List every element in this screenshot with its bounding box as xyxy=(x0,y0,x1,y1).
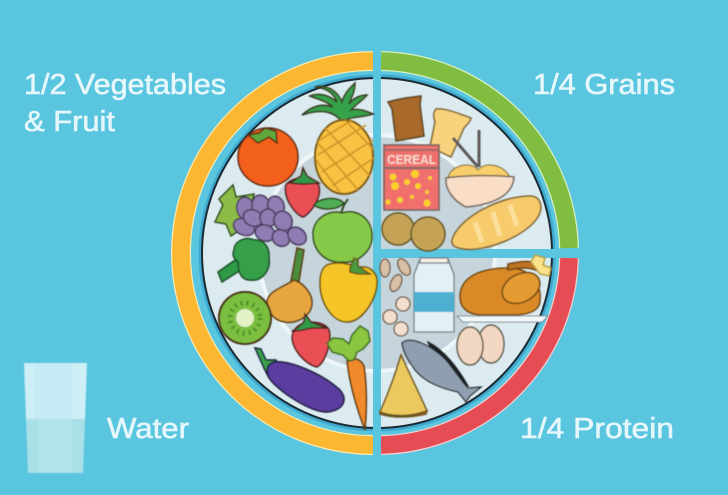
food: fish xyxy=(402,340,481,402)
heading: vegetables and fruit: & Fruit xyxy=(24,106,115,138)
heading: water: Water xyxy=(107,413,189,445)
food: cereal box: CEREAL xyxy=(387,152,436,167)
food: second strawberry xyxy=(292,314,330,367)
food: cereal box xyxy=(384,145,439,210)
food: eggplant xyxy=(255,348,344,412)
food: cookies xyxy=(382,213,445,251)
food: carrot xyxy=(327,326,370,430)
food: serving plate xyxy=(457,316,548,322)
foods xyxy=(215,83,551,430)
heading: protein: 1/4 Protein xyxy=(520,413,674,445)
food: baguette xyxy=(452,196,541,249)
food: broccoli xyxy=(218,239,269,282)
heading: grains: 1/4 Grains xyxy=(533,69,675,101)
ring: protein arc xyxy=(381,258,569,445)
food: cereal bowl with spoons xyxy=(446,130,514,207)
ring: vegetables and fruit arc xyxy=(181,61,373,445)
food: eggs xyxy=(457,325,504,365)
food: beans and nuts xyxy=(380,257,413,336)
infographic xyxy=(23,51,674,474)
food: dark bread xyxy=(388,96,424,141)
food: yellow pepper xyxy=(320,258,377,322)
food: cheese xyxy=(380,355,427,417)
heading: vegetables and fruit xyxy=(24,69,226,138)
food: tomato xyxy=(238,128,298,186)
food: kiwi xyxy=(219,292,271,344)
icon: glass of water xyxy=(24,363,87,473)
food: pineapple xyxy=(302,83,374,194)
ring: grains arc xyxy=(381,61,569,248)
food: green apple xyxy=(313,199,372,262)
food: roast chicken xyxy=(460,255,551,315)
food: light bread xyxy=(430,109,471,157)
food: onion xyxy=(267,248,312,322)
heading: vegetables and fruit: 1/2 Vegetables xyxy=(24,69,226,101)
food: strawberry xyxy=(285,168,319,217)
plate xyxy=(198,68,561,444)
food: milk carton xyxy=(414,258,454,332)
food: grapes and leaf xyxy=(215,185,310,250)
